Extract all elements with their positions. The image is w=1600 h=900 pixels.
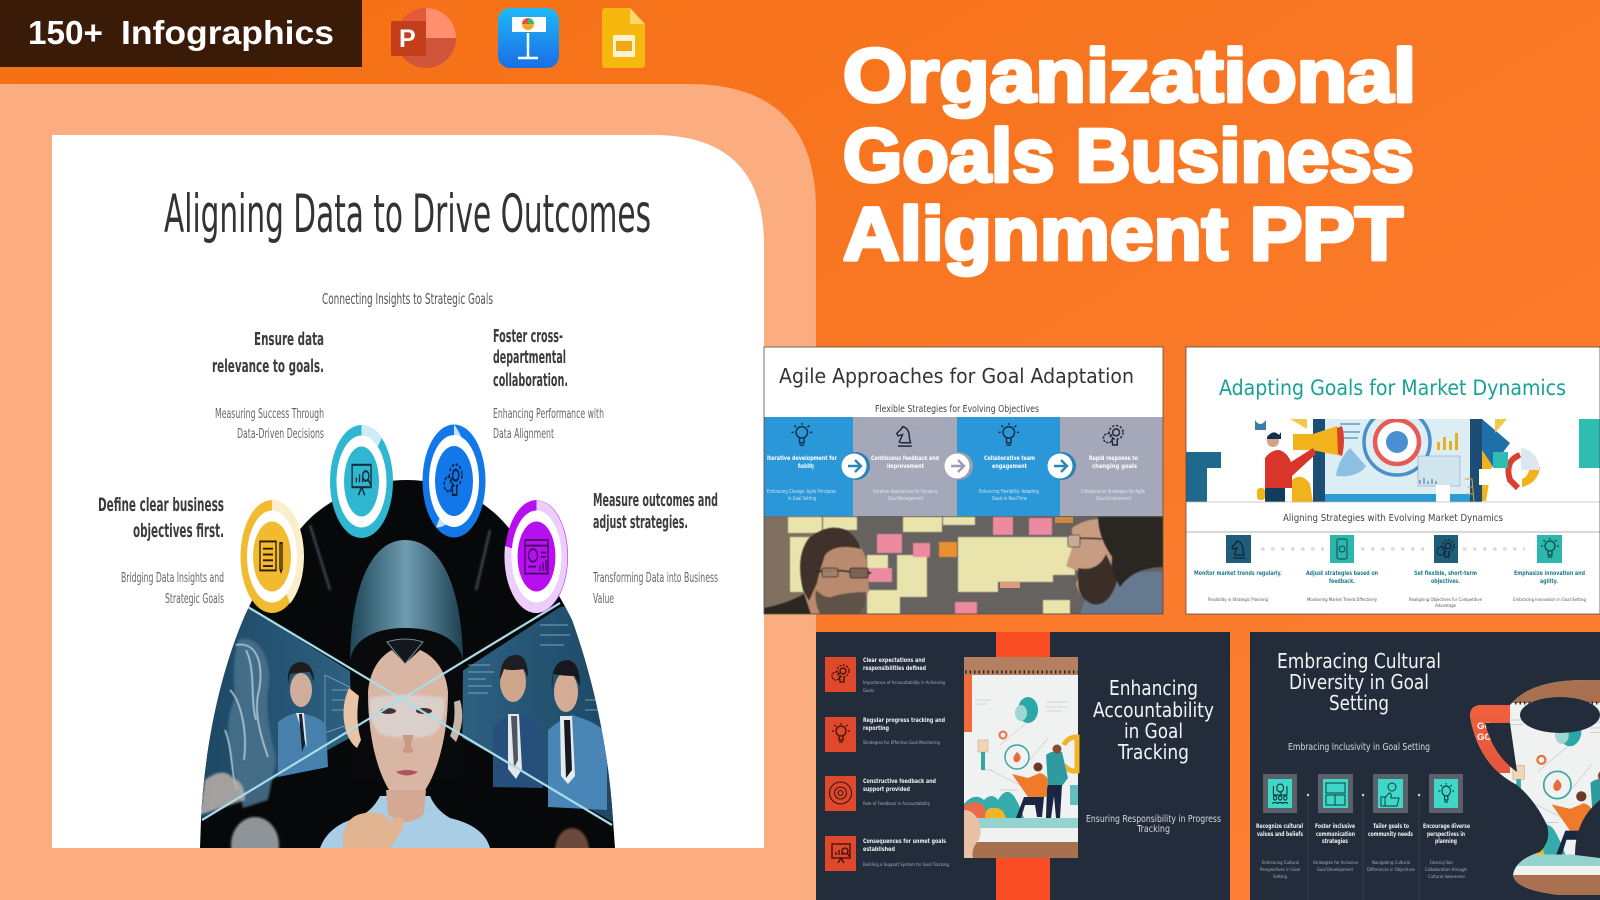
point: Foster collaboration: Foster cross-: [493, 326, 563, 347]
accountability title: in Goal: [1124, 719, 1183, 743]
agile band: Collaborative Strategies for Agile: [1081, 489, 1145, 495]
item 1: responsibilities defined: [863, 664, 926, 672]
accountability subtitle: [1086, 814, 1221, 835]
step 4: Embracing Innovation in Goal Setting: [1513, 597, 1586, 603]
column 3: Navigating Cultural: [1372, 860, 1410, 866]
trophy illustration: [1465, 675, 1600, 900]
point: Measure outcomes: Value: [593, 591, 614, 607]
slide title: Aligning Data to Drive Outcomes: [164, 184, 651, 245]
cultural title: [1277, 649, 1441, 715]
point: Foster collaboration: departmental: [493, 347, 566, 368]
agile band: Iterative development for: [767, 454, 838, 462]
column 1: [1256, 774, 1303, 880]
main title: Goals Business: [843, 114, 1414, 198]
ring: blue icon: [422, 424, 486, 538]
item 2: reporting: [863, 724, 889, 732]
agile band: Enhancing Flexibility: Adapting: [979, 489, 1039, 495]
badge: 150+ Infographics: 150+: [28, 14, 103, 51]
item 2: [825, 716, 945, 752]
item 1: [825, 656, 945, 694]
trophy illustration: GO: [1477, 721, 1492, 732]
accountability subtitle: Tracking: [1136, 824, 1170, 835]
step 4: agility.: [1540, 577, 1558, 585]
helmet: [350, 540, 463, 740]
point: Measure outcomes: Transforming Data into Business: [592, 570, 718, 586]
badge: 150+ Infographics: Infographics: [121, 14, 334, 51]
point: Ensure data relevance: [212, 329, 324, 442]
illustration: megaphone and dashboard: [1186, 419, 1600, 502]
item 4: Building a Support System for Goal Tracking: [863, 862, 949, 868]
column 2: communication: [1316, 831, 1355, 838]
panel: Agile Approaches for Goal Adaptation: [764, 347, 1163, 614]
light beams: [202, 603, 612, 825]
point: Ensure data relevance: relevance to goals.: [212, 356, 324, 377]
step 2: Adjust strategies based on: [1306, 569, 1378, 577]
item 1: Goals: [863, 688, 874, 694]
cultural title: Embracing Cultural: [1277, 649, 1441, 673]
item 3: Constructive feedback and: [863, 777, 936, 785]
column 2: Strategies for Inclusive: [1313, 860, 1358, 866]
agile subtitle: Flexible Strategies for Evolving Objectives: [875, 404, 1039, 415]
right panel: [462, 606, 614, 822]
point: Ensure data relevance: Ensure data: [254, 329, 324, 350]
step 3: Realigning Objectives for Competitive: [1409, 597, 1482, 603]
agile band: in Goal Setting: [788, 496, 816, 502]
step 2: [1306, 535, 1378, 603]
point: Foster collaboration: Enhancing Performance with: [493, 406, 604, 422]
point: Measure outcomes: Measure outcomes and: [593, 490, 718, 511]
agile band: Goal Management: [888, 496, 923, 502]
item 1: Clear expectations and: [863, 656, 925, 664]
point: Define objectives: [98, 494, 224, 607]
step 2: feedback.: [1329, 577, 1355, 585]
cultural subtitle: Embracing Inclusivity in Goal Setting: [1288, 742, 1430, 753]
left panel: [201, 608, 350, 818]
cultural title: Setting: [1329, 691, 1389, 715]
panel: Embracing Cultural Diversity in Goal Setting: [1250, 632, 1600, 900]
panel: Aligning Data to Drive Outcomes: [52, 135, 764, 873]
right man: [1066, 517, 1163, 614]
column 1: values and beliefs: [1257, 831, 1303, 838]
accountability title: Tracking: [1117, 740, 1189, 764]
ring: yellow icon: [240, 500, 304, 613]
agile band: [764, 417, 1163, 516]
column 1: Embracing Cultural: [1262, 860, 1299, 866]
agile band: flexibility: [798, 462, 814, 470]
item 3: support provided: [863, 785, 910, 793]
agile band: Embracing Change: Agile Principles: [767, 489, 836, 495]
ring: purple icon: [504, 500, 568, 613]
column 4: planning: [1435, 838, 1457, 845]
agile band: Goal Achievement: [1096, 496, 1131, 502]
agile band: Iterative Approaches for Dynamic: [873, 489, 938, 495]
column 4: Collaboration through: [1425, 867, 1467, 873]
face: [344, 650, 462, 790]
left man: [764, 528, 871, 614]
market subtitle: Aligning Strategies with Evolving Market Dynamics: [1283, 513, 1503, 524]
column 3: [1367, 774, 1416, 873]
column 4: Encourage diverse: [1423, 823, 1470, 830]
slide subtitle: Connecting Insights to Strategic Goals: [322, 290, 493, 308]
item 2: Regular progress tracking and: [863, 716, 945, 724]
column 1: Setting: [1273, 874, 1287, 880]
icon: Google Slides: [602, 8, 645, 68]
point: Define objectives: Bridging Data Insights and: [121, 570, 224, 586]
icon: PowerPoint: [391, 8, 456, 68]
badge: 150+ Infographics: [0, 0, 362, 67]
column 4: perspectives in: [1427, 831, 1465, 838]
step 1: Flexibility in Strategic Planning: [1208, 597, 1268, 603]
icon: PowerPoint: P: [399, 25, 416, 53]
item 4: Consequences for unmet goals: [863, 837, 946, 845]
item 4: [825, 836, 949, 871]
step 2: Monitoring Market Trends Effectively: [1307, 597, 1377, 603]
item 3: Role of Feedback in Accountability: [863, 801, 930, 807]
step 3: [1409, 535, 1482, 609]
agile band: engagement: [992, 462, 1027, 470]
step 1: [1194, 535, 1282, 603]
column 2: strategies: [1322, 838, 1348, 845]
trophy illustration: GO: [1477, 732, 1492, 743]
point: Define objectives: objectives first.: [133, 520, 224, 542]
image: woman and projected business panels: [195, 475, 620, 873]
accountability title: Enhancing: [1109, 676, 1198, 700]
point: Ensure data relevance: Data-Driven Decisions: [237, 426, 324, 442]
item 2: Strategies for Effective Goal Monitoring: [863, 740, 940, 746]
photo: two men at sticky-note board: [764, 516, 1163, 614]
step 3: Advantage: [1435, 603, 1456, 609]
agile band: Goals in Real-Time: [992, 496, 1027, 502]
point: Foster collaboration: collaboration.: [493, 370, 568, 391]
main title: [843, 34, 1416, 276]
cultural title: Diversity in Goal: [1289, 670, 1429, 694]
step 3: Set flexible, short-term: [1414, 569, 1477, 577]
column 4: Cultural Awareness: [1428, 874, 1466, 880]
arrow 1: [842, 452, 870, 480]
agile band: Collaborative team: [984, 454, 1035, 462]
main title: Organizational: [843, 34, 1416, 118]
column 3: Tailor goals to: [1373, 823, 1409, 830]
point: Define objectives: Define clear business: [98, 494, 224, 516]
arrow 2: [944, 452, 973, 480]
point: Foster collaboration: [493, 326, 604, 442]
item 1: Importance of Accountability in Achieving: [863, 680, 945, 686]
point: Measure outcomes: adjust strategies.: [593, 512, 688, 533]
torso and hand: [230, 790, 590, 848]
notebook illustration: [964, 657, 1078, 858]
item 3: [825, 776, 936, 811]
agile band: improvement: [887, 462, 924, 470]
point: Define objectives: Strategic Goals: [165, 591, 224, 607]
peach backdrop panel: [0, 84, 816, 900]
point: Measure outcomes: [592, 490, 718, 607]
item 4: established: [863, 845, 895, 853]
arrow 3: [1048, 452, 1076, 480]
column 4: [1423, 774, 1470, 880]
step 3: objectives.: [1431, 577, 1460, 585]
column 2: Foster inclusive: [1315, 823, 1355, 830]
step 1: Monitor market trends regularly.: [1194, 569, 1282, 577]
accountability title: Accountability: [1093, 698, 1214, 722]
agile band: Continuous feedback and: [871, 454, 939, 462]
column 4: Enhancing Team: [1430, 860, 1453, 866]
agile title: Agile Approaches for Goal Adaptation: [779, 364, 1134, 388]
column 1: Perspectives in Goal: [1260, 867, 1300, 873]
panel: Adapting Goals for Market Dynamics: [1186, 347, 1600, 614]
column 1: Recognize cultural: [1256, 823, 1303, 830]
market title: Adapting Goals for Market Dynamics: [1219, 376, 1566, 400]
icon: Keynote: [498, 8, 559, 68]
agile band: Rapid response to: [1089, 454, 1138, 462]
column 2: [1313, 774, 1358, 873]
point: Foster collaboration: Data Alignment: [493, 426, 554, 442]
agile band: changing goals: [1092, 462, 1137, 470]
step 4: [1513, 535, 1586, 603]
panel: Enhancing Accountability in Goal Tracking: [816, 632, 1230, 900]
point: Ensure data relevance: Measuring Success Through: [215, 406, 324, 422]
main title: Alignment PPT: [843, 192, 1403, 276]
column 3: community needs: [1368, 831, 1413, 838]
accountability subtitle: Ensuring Responsibility in Progress: [1086, 814, 1221, 825]
accountability title: [1093, 676, 1214, 764]
column 2: Goal Development: [1317, 867, 1353, 873]
ring: teal icon: [330, 425, 393, 538]
column 3: Differences in Objectives: [1367, 867, 1416, 873]
